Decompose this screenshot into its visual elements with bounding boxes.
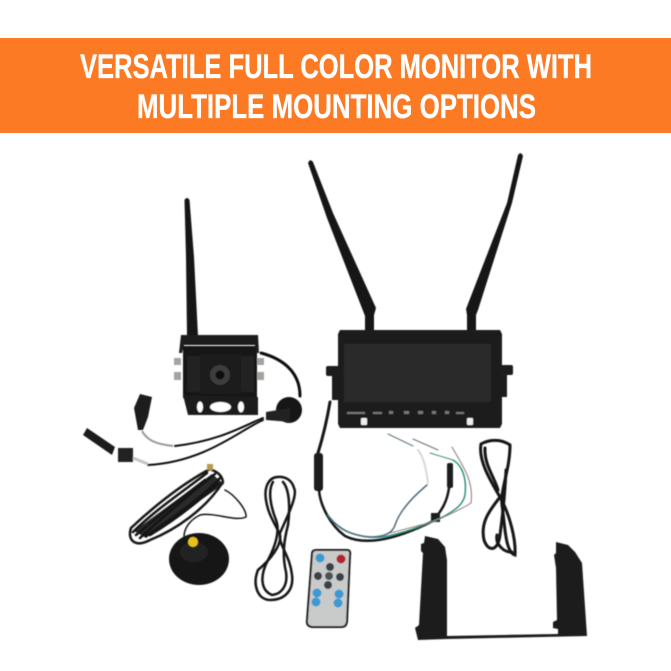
- camera lens: [210, 365, 230, 385]
- camera cable: [148, 353, 300, 465]
- title: MULTIPLE MOUNTING OPTIONS: [137, 88, 536, 126]
- connector cables: [83, 394, 173, 464]
- camera bracket: [183, 395, 258, 415]
- camera body: [183, 346, 257, 398]
- monitor wiring harness: [314, 402, 471, 541]
- antenna connector: [207, 464, 213, 470]
- antenna cable coil: [130, 469, 246, 543]
- camera unit: [83, 198, 302, 465]
- right antenna: [466, 153, 523, 332]
- title: [80, 48, 592, 126]
- mounting bracket: [415, 536, 587, 640]
- left antenna: [308, 160, 376, 332]
- bracket clips: [361, 418, 473, 425]
- extension cable coil: [256, 477, 295, 600]
- remote control: [307, 550, 350, 627]
- banner: [0, 38, 671, 133]
- product kit photo: [83, 153, 587, 640]
- monitor frame: [338, 330, 502, 428]
- antenna gold rings: [364, 330, 477, 333]
- monitor buttons: [347, 411, 464, 414]
- side knobs: [326, 365, 513, 400]
- magnetic antenna base: [169, 533, 229, 585]
- remote buttons: [312, 554, 346, 608]
- coiled cable right: [481, 440, 515, 555]
- monitor screen: [344, 344, 491, 402]
- camera grommet: [276, 397, 302, 423]
- camera hood: [179, 335, 259, 353]
- camera antenna: [184, 198, 198, 336]
- monitor unit: [308, 153, 523, 428]
- camera side bolts: [174, 358, 264, 380]
